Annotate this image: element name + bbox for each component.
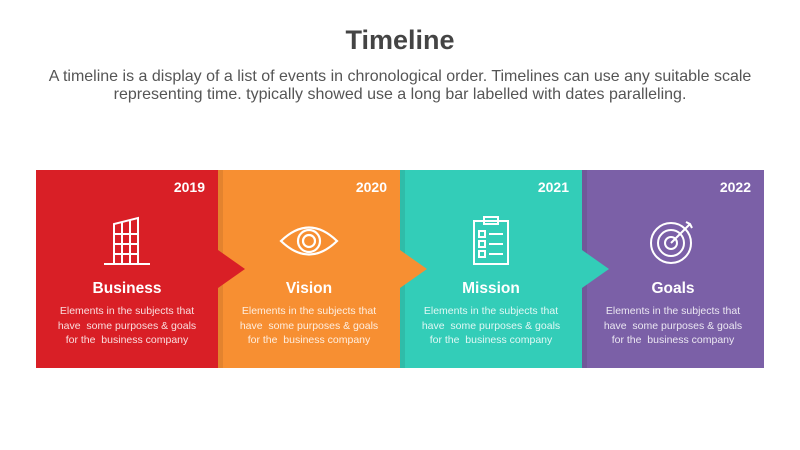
panel: goals: have some purposes & goals xyxy=(604,320,742,332)
panel: mission xyxy=(400,170,582,368)
icon: eye xyxy=(280,226,338,256)
panel: business: 2019 xyxy=(174,179,205,195)
panel: goals: Elements in the subjects that xyxy=(606,305,740,317)
panel: business: for the business company xyxy=(66,334,188,346)
panel: mission: Elements in the subjects that xyxy=(424,305,558,317)
icon: building xyxy=(104,216,150,265)
panel: vision: Vision xyxy=(286,280,332,297)
title: Timeline xyxy=(345,25,455,55)
subtitle: representing time. typically showed use a long bar labelled with dates paralleling. xyxy=(114,86,686,103)
arrow: red xyxy=(218,250,245,288)
subtitle: A timeline is a display of a list of events in chronological order. Timelines can use any suitable scale xyxy=(49,68,751,85)
panel: goals xyxy=(582,170,764,368)
shadow strips xyxy=(218,170,223,368)
panel: vision xyxy=(218,170,400,368)
panel: goals: 2022 xyxy=(720,179,751,195)
panel: business: Business xyxy=(93,280,161,297)
panel: vision: Elements in the subjects that xyxy=(242,305,376,317)
icon: clipboard xyxy=(473,216,509,265)
panel: vision: for the business company xyxy=(248,334,370,346)
subtitle xyxy=(48,68,751,103)
panel: business: have some purposes & goals xyxy=(58,320,196,332)
arrow: teal xyxy=(582,250,609,288)
icon: target xyxy=(650,221,693,264)
panel: business: Elements in the subjects that xyxy=(60,305,194,317)
panel: mission: for the business company xyxy=(430,334,552,346)
panel: mission: have some purposes & goals xyxy=(422,320,560,332)
panel: vision: have some purposes & goals xyxy=(240,320,378,332)
panel: mission: Mission xyxy=(462,280,520,297)
arrow: orange xyxy=(400,250,427,288)
panel: goals: for the business company xyxy=(612,334,734,346)
panel: mission: 2021 xyxy=(538,179,569,195)
panel: business xyxy=(36,170,218,368)
panel: goals: Goals xyxy=(651,280,695,297)
panel: vision: 2020 xyxy=(356,179,387,195)
